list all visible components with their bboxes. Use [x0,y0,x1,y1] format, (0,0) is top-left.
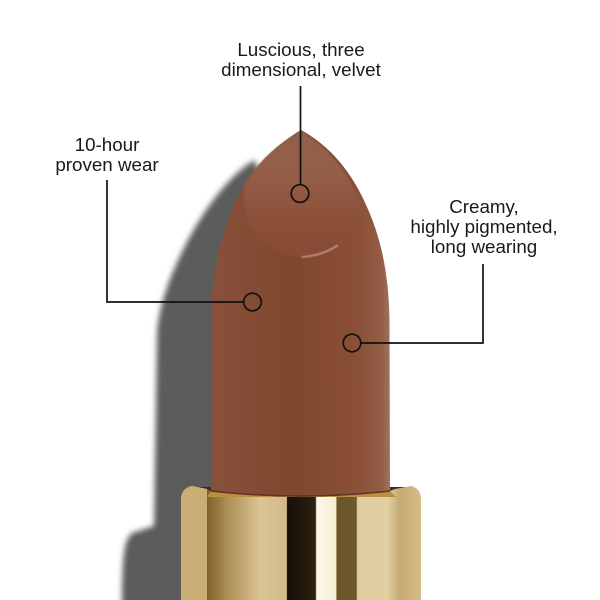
right callout line [343,264,483,352]
label: wear: 10-hour [75,134,139,155]
label: velvet: dimensional, velvet [221,59,381,80]
tip edge highlight [302,245,338,257]
label: wear [55,134,159,175]
shadow [122,160,300,600]
left callout line [107,180,261,311]
label: creamy: Creamy, [449,196,519,217]
label: creamy: highly pigmented, [410,216,558,237]
case rim band [207,491,396,497]
callout lines [107,86,483,352]
bullet angled tip [244,131,361,257]
label: wear: proven wear [55,154,159,175]
label: velvet [221,39,381,80]
label: creamy: long wearing [431,236,537,257]
label: velvet: Luscious, three [237,39,365,60]
top callout line [291,86,309,202]
lipstick bullet [211,130,390,497]
gold case [181,486,421,600]
case back rim [192,487,410,496]
label: creamy [410,196,558,257]
